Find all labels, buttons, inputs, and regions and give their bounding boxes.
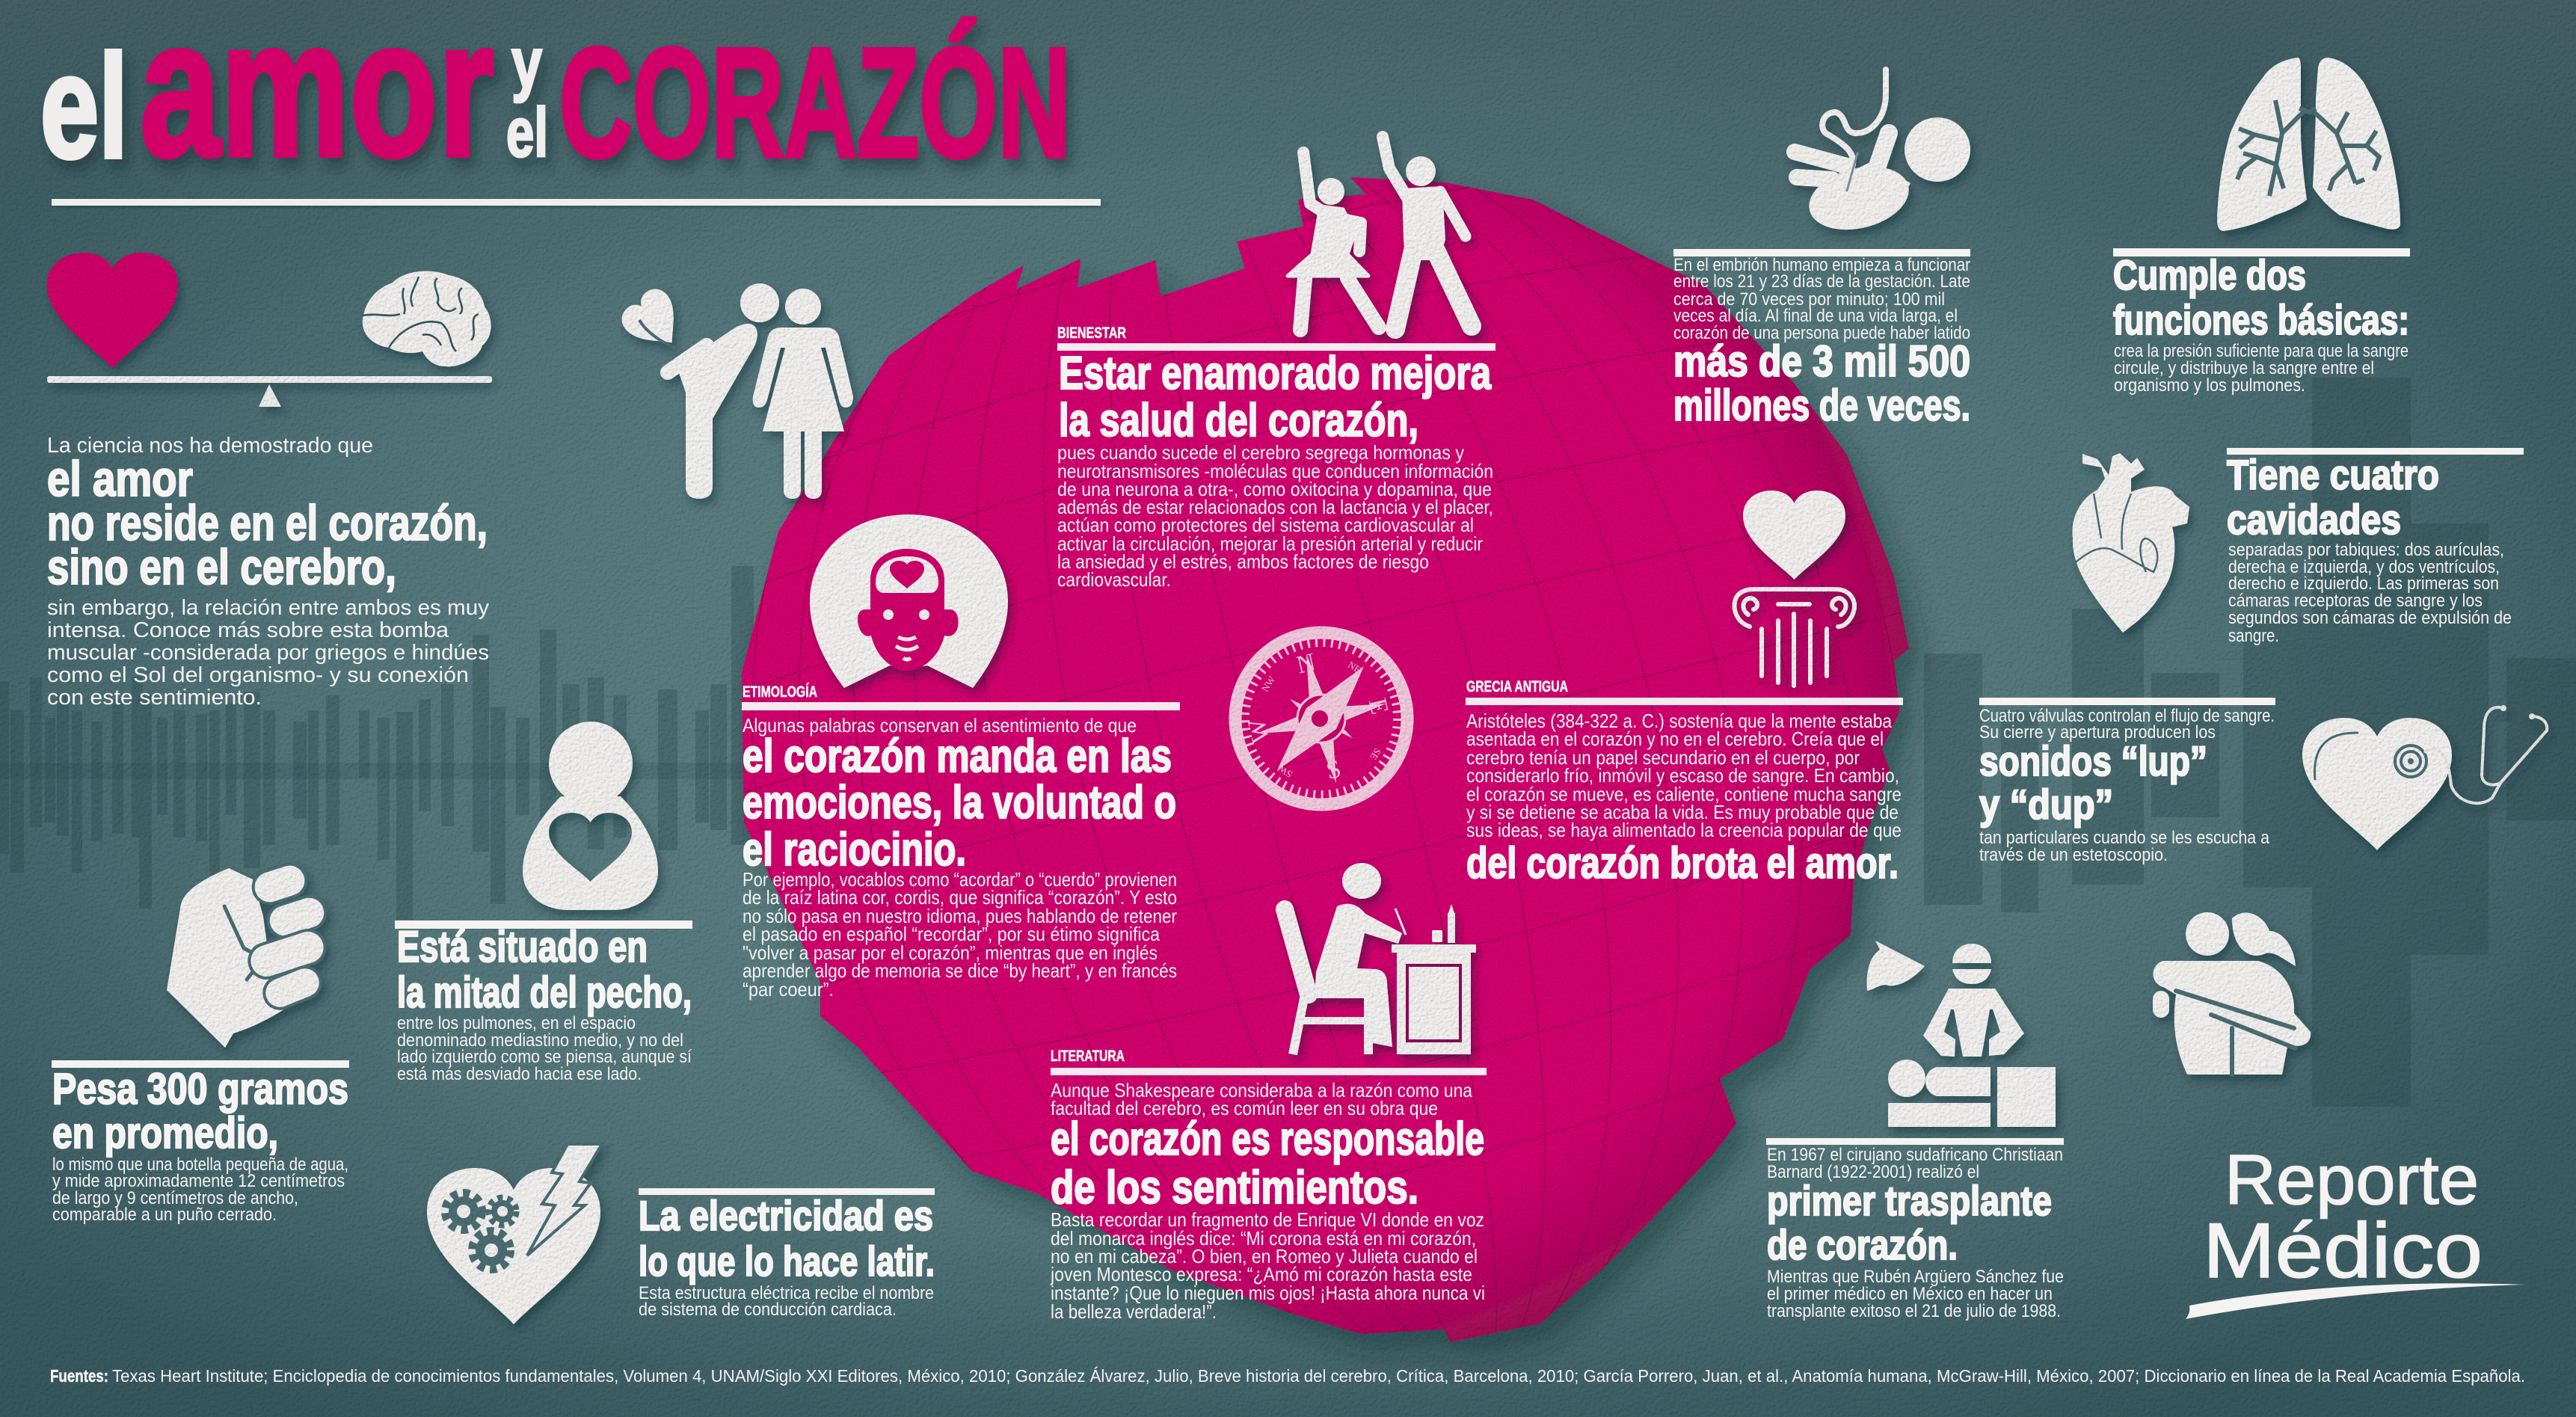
text: grecia antigua: sus ideas, se haya alimentado la creencia popular de que bbox=[1466, 819, 1902, 841]
text: pesa 300 gramos: en promedio, bbox=[52, 1109, 278, 1158]
text: pesa 300 gramos bbox=[52, 1060, 349, 1225]
text: etimología: Por ejemplo, vocablos como “acordar” o “cuerdo” provienen bbox=[743, 868, 1177, 891]
text: grecia antigua: cerebro tenía un papel secundario en el cuerpo, por bbox=[1466, 746, 1860, 769]
compass letters: E bbox=[1363, 695, 1394, 717]
desk bbox=[1392, 904, 1476, 1054]
icon: compass bbox=[1235, 633, 1407, 805]
text: intro: como el Sol del organismo- y su conexión bbox=[47, 663, 469, 687]
donor heart bbox=[1867, 941, 1925, 991]
text: bienestar: neurotransmisores -moléculas que conducen información bbox=[1057, 460, 1493, 482]
text: intro: con este sentimiento. bbox=[47, 686, 262, 710]
woman bbox=[753, 289, 853, 499]
icon: heart with gears and lightning bbox=[427, 1144, 602, 1324]
compass star bbox=[1241, 639, 1401, 799]
text: etimología: aprender algo de memoria se dice “by heart”, y en francés bbox=[743, 959, 1177, 982]
icon: lungs bbox=[2217, 58, 2400, 231]
compass letters: N bbox=[1294, 648, 1318, 680]
text: pesa 300 gramos: Pesa 300 gramos bbox=[52, 1065, 348, 1113]
text: primer trasplante: primer trasplante bbox=[1767, 1177, 2052, 1224]
text: bienestar: Estar enamorado mejora bbox=[1059, 348, 1491, 399]
footer sources: Fuentes: bbox=[50, 1366, 108, 1386]
text: electricidad: lo que lo hace latir. bbox=[639, 1238, 935, 1285]
text: electricidad bbox=[639, 1188, 935, 1320]
globe grid lines bbox=[742, 178, 1902, 1341]
text: literatura: LITERATURA bbox=[1051, 1048, 1125, 1065]
text: bienestar: cardiovascular. bbox=[1057, 568, 1171, 591]
icon: brain on balance bbox=[362, 271, 491, 366]
text: grecia antigua bbox=[1466, 678, 1903, 888]
text: embrión: más de 3 mil 500 bbox=[1673, 337, 1970, 386]
text: situado en el pecho: la mitad del pecho, bbox=[397, 968, 692, 1017]
text: sonidos lup y dup: Cuatro válvulas controlan el flujo de sangre. bbox=[1979, 706, 2275, 726]
text: grecia antigua: GRECIA ANTIGUA bbox=[1466, 678, 1568, 695]
text: pesa 300 gramos: y mide aproximadamente 12 centímetros bbox=[52, 1171, 345, 1191]
text: intro: muscular -considerada por griegos e hindúes bbox=[47, 641, 489, 665]
flying heart bbox=[616, 283, 692, 360]
text: situado en el pecho: denominado mediastino medio, y no del bbox=[397, 1030, 683, 1051]
text: primer trasplante bbox=[1766, 1138, 2064, 1321]
text: cuatro cavidades: sangre. bbox=[2228, 626, 2279, 646]
text: sonidos lup y dup: sonidos “lup” bbox=[1979, 737, 2207, 784]
text: electricidad: La electricidad es bbox=[639, 1192, 933, 1239]
text: cuatro cavidades bbox=[2227, 448, 2524, 646]
text: primer trasplante: transplante exitoso el 21 de julio de 1988. bbox=[1767, 1301, 2061, 1321]
text: bienestar: activar la circulación, mejorar la presión arterial y reducir bbox=[1057, 532, 1483, 555]
text: grecia antigua: del corazón brota el amor. bbox=[1466, 839, 1899, 888]
text: intro: sin embargo, la relación entre ambos es muy bbox=[47, 596, 490, 620]
icon: writer at desk bbox=[1285, 863, 1476, 1054]
title: el bbox=[506, 93, 548, 171]
text: etimología: "volver a pasar por el corazón”, mientras que en inglés bbox=[743, 941, 1158, 964]
writer figure bbox=[1315, 863, 1406, 1047]
text: situado en el pecho bbox=[395, 920, 692, 1084]
text: pesa 300 gramos: de largo y 9 centímetros de ancho, bbox=[52, 1188, 298, 1208]
text: primer trasplante: el primer médico en México en hacer un bbox=[1767, 1284, 2053, 1304]
balance beam bbox=[47, 376, 492, 407]
title bbox=[40, 0, 1071, 197]
icon: heart on balance bbox=[47, 253, 178, 368]
title rule bbox=[52, 199, 1101, 206]
text: bienestar: actúan como protectores del sistema cardiovascular al bbox=[1057, 514, 1474, 536]
text: electricidad: Esta estructura eléctrica recibe el nombre bbox=[639, 1283, 934, 1303]
text: funciones básicas: circule, y distribuye la sangre entre el bbox=[2114, 358, 2374, 378]
icon: couple kissing bbox=[616, 283, 853, 499]
icon: hugging couple bbox=[2153, 912, 2311, 1075]
text: intro: sino en el cerebro, bbox=[47, 539, 396, 594]
text: funciones básicas bbox=[2113, 248, 2410, 396]
footer sources: Texas Heart Institute; Enciclopedia de conocimientos fundamentales, Volumen 4, UNAM/Siglo XXI Editores, México, 2010; González Álvarez, Julio, Breve historia del cerebro, Crítica, Barcelona, 2010; García Porrero, Juan, et al., Anatomía humana, McGraw-Hill, México, 2007; Diccionario en línea de la Real Academia Española. bbox=[112, 1366, 2525, 1386]
text: situado en el pecho: está más desviado hacia ese lado. bbox=[397, 1064, 642, 1084]
text: grecia antigua: Aristóteles (384-322 a. C.) sostenía que la mente estaba bbox=[1466, 710, 1892, 732]
logo: Reporte Médico: Reporte bbox=[2225, 1140, 2479, 1219]
text: electricidad: de sistema de conducción cardiaca. bbox=[639, 1300, 897, 1320]
text: primer trasplante: de corazón. bbox=[1767, 1221, 1958, 1268]
background pulse bars bbox=[0, 378, 2576, 1107]
text: bienestar bbox=[1057, 325, 1496, 591]
text: sonidos lup y dup bbox=[1979, 698, 2275, 865]
icon: person with heart bbox=[523, 722, 658, 910]
text: etimología: emociones, la voluntad o bbox=[743, 777, 1176, 829]
text: intro: La ciencia nos ha demostrado que bbox=[47, 434, 373, 458]
text: etimología: el pasado en español “recordar”, por su étimo significa bbox=[743, 923, 1160, 945]
compass letters: S bbox=[1324, 755, 1344, 785]
text: situado en el pecho: lado izquierdo como se piensa, aunque sí bbox=[397, 1047, 692, 1067]
text: intro: no reside en el corazón, bbox=[47, 495, 488, 550]
text: grecia antigua: el corazón se mueve, es caliente, contiene mucha sangre bbox=[1466, 783, 1902, 805]
compass letters: SE bbox=[1368, 746, 1383, 762]
text: literatura: instante? ¡Que lo nieguen mis ojos! ¡Hasta ahora nunca vi bbox=[1051, 1282, 1485, 1304]
text: primer trasplante: Mientras que Rubén Argüero Sánchez fue bbox=[1767, 1267, 2064, 1287]
chair bbox=[1285, 909, 1368, 1054]
logo: Reporte Médico: Médico bbox=[2203, 1208, 2483, 1294]
text: bienestar: BIENESTAR bbox=[1057, 325, 1126, 342]
text: cuatro cavidades: cavidades bbox=[2227, 496, 2401, 543]
text: literatura: del monarca inglés dice: “Mi corona está en mi corazón, bbox=[1051, 1227, 1476, 1250]
text: literatura bbox=[1050, 1048, 1487, 1323]
compass letters bbox=[1243, 648, 1394, 785]
text: cuatro cavidades: segundos son cámaras de expulsión de bbox=[2228, 608, 2512, 628]
text: literatura: no en mi cabeza”. O bien, en Romeo y Julieta cuando el bbox=[1051, 1245, 1478, 1267]
text: pesa 300 gramos: lo mismo que una botella pequeña de agua, bbox=[52, 1155, 348, 1175]
icon: heart with stethoscope bbox=[2302, 705, 2547, 850]
text: intro: el amor bbox=[47, 451, 193, 506]
text: sonidos lup y dup: tan particulares cuando se les escucha a bbox=[1979, 828, 2270, 848]
text: bienestar: además de estar relacionados con la lactancia y el placer, bbox=[1057, 496, 1493, 518]
text: literatura: el corazón es responsable bbox=[1051, 1113, 1484, 1165]
text: grecia antigua: asentada en el corazón y no en el cerebro. Creía que el bbox=[1466, 728, 1884, 750]
text: intro: intensa. Conoce más sobre esta bomba bbox=[47, 618, 449, 642]
surgeon bbox=[1923, 944, 2024, 1057]
text: pesa 300 gramos: comparable a un puño cerrado. bbox=[52, 1205, 277, 1225]
text: literatura: de los sentimientos. bbox=[1051, 1162, 1418, 1214]
compass letters: SW bbox=[1276, 763, 1294, 780]
text: sonidos lup y dup: través de un estetoscopio. bbox=[1979, 845, 2168, 865]
text: literatura: Aunque Shakespeare consideraba a la razón como una bbox=[1051, 1079, 1472, 1101]
text: literatura: facultad del cerebro, es común leer en su obra que bbox=[1051, 1097, 1438, 1119]
man bbox=[668, 283, 779, 499]
text: bienestar: pues cuando sucede el cerebro segrega hormonas y bbox=[1057, 441, 1464, 464]
text: embrión bbox=[1673, 249, 1970, 430]
compass letters: NE bbox=[1346, 659, 1363, 675]
text: bienestar: la salud del corazón, bbox=[1059, 395, 1418, 446]
text: embrión: corazón de una persona puede haber latido bbox=[1673, 323, 1970, 343]
text: primer trasplante: Barnard (1922-2001) realizó el bbox=[1767, 1162, 1979, 1182]
text: etimología: no sólo pasa en nuestro idioma, pues hablando de retener bbox=[743, 905, 1177, 927]
dancing man bbox=[1383, 137, 1472, 329]
text: etimología: de la raíz latina cor, cordis, que significa “corazón”. Y esto bbox=[743, 886, 1177, 909]
text: etimología bbox=[742, 683, 1180, 1000]
text: cuatro cavidades: derecha e izquierda, y dos ventrículos, bbox=[2228, 557, 2500, 577]
text: bienestar: la ansiedad y el estrés, ambos factores de riesgo bbox=[1057, 550, 1429, 573]
text: embrión: millones de veces. bbox=[1673, 381, 1970, 430]
background pulse centre band bbox=[0, 763, 748, 779]
patient and table bbox=[1888, 1060, 2056, 1127]
text: etimología: Algunas palabras conservan el asentimiento de que bbox=[743, 714, 1137, 737]
title: el bbox=[40, 25, 128, 188]
text: situado en el pecho: Está situado en bbox=[397, 923, 648, 971]
text: literatura: la belleza verdadera!”. bbox=[1051, 1300, 1217, 1323]
text: cuatro cavidades: cámaras receptoras de sangre y los bbox=[2228, 591, 2483, 611]
text: funciones básicas: Cumple dos bbox=[2113, 251, 2306, 298]
text: embrión: entre los 21 y 23 días de la gestación. Late bbox=[1673, 271, 1970, 292]
icon: dancing couple bbox=[1288, 137, 1472, 330]
icon: surgeon and transplant bbox=[1867, 941, 2056, 1127]
text: grecia antigua: considerarlo frío, inmóvil y escaso de sangre. En cambio, bbox=[1466, 764, 1899, 787]
logo: Reporte Médico bbox=[2186, 1140, 2525, 1319]
text: embrión: En el embrión humano empieza a funcionar bbox=[1673, 255, 1970, 275]
text: funciones básicas: crea la presión suficiente para que la sangre bbox=[2114, 341, 2409, 361]
text: sonidos lup y dup: Su cierre y apertura producen los bbox=[1979, 722, 2216, 743]
icon: anatomical heart bbox=[2072, 453, 2189, 633]
title: y bbox=[511, 23, 542, 103]
heart-shaped pink globe bbox=[742, 177, 1930, 1364]
text: situado en el pecho: entre los pulmones, en el espacio bbox=[397, 1013, 636, 1033]
icon: heart on greek column bbox=[1735, 491, 1854, 686]
title: CORAZÓN bbox=[559, 16, 1071, 190]
icon: embryo bbox=[1795, 70, 1970, 239]
text: cuatro cavidades: Tiene cuatro bbox=[2227, 451, 2439, 498]
text: etimología: “par coeur”. bbox=[743, 978, 834, 1000]
text: cuatro cavidades: separadas por tabiques: dos aurículas, bbox=[2228, 540, 2504, 560]
compass letters: NW bbox=[1259, 674, 1278, 694]
text: cuatro cavidades: derecho e izquierdo. Las primeras son bbox=[2228, 574, 2499, 594]
text: primer trasplante: En 1967 el cirujano sudafricano Christiaan bbox=[1767, 1145, 2063, 1165]
text: grecia antigua: y si se detiene se acaba la vida. Es muy probable que de bbox=[1466, 801, 1899, 823]
text: embrión: veces al día. Al final de una vida larga, el bbox=[1673, 306, 1958, 326]
icon: head with heart in brain bbox=[810, 514, 1008, 688]
text: literatura: joven Montesco expresa: “¿Amó mi corazón hasta este bbox=[1050, 1263, 1472, 1285]
text: etimología: el raciocinio. bbox=[743, 824, 966, 876]
text: sonidos lup y dup: y “dup” bbox=[1979, 781, 2113, 828]
icon: fist bbox=[167, 860, 330, 1048]
text: funciones básicas: organismo y los pulmones. bbox=[2114, 375, 2305, 396]
text: etimología: ETIMOLOGÍA bbox=[743, 683, 817, 701]
text: funciones básicas: funciones básicas: bbox=[2113, 296, 2409, 343]
text: embrión: cerca de 70 veces por minuto; 100 mil bbox=[1673, 289, 1945, 310]
text: bienestar: de una neurona a otra-, como oxitocina y dopamina, que bbox=[1057, 478, 1492, 500]
compass letters: W bbox=[1243, 716, 1275, 746]
text: etimología: el corazón manda en las bbox=[743, 731, 1172, 782]
text: intro bbox=[47, 434, 490, 710]
text: literatura: Basta recordar un fragmento de Enrique VI donde en voz bbox=[1051, 1208, 1484, 1231]
dancing woman bbox=[1288, 153, 1379, 330]
